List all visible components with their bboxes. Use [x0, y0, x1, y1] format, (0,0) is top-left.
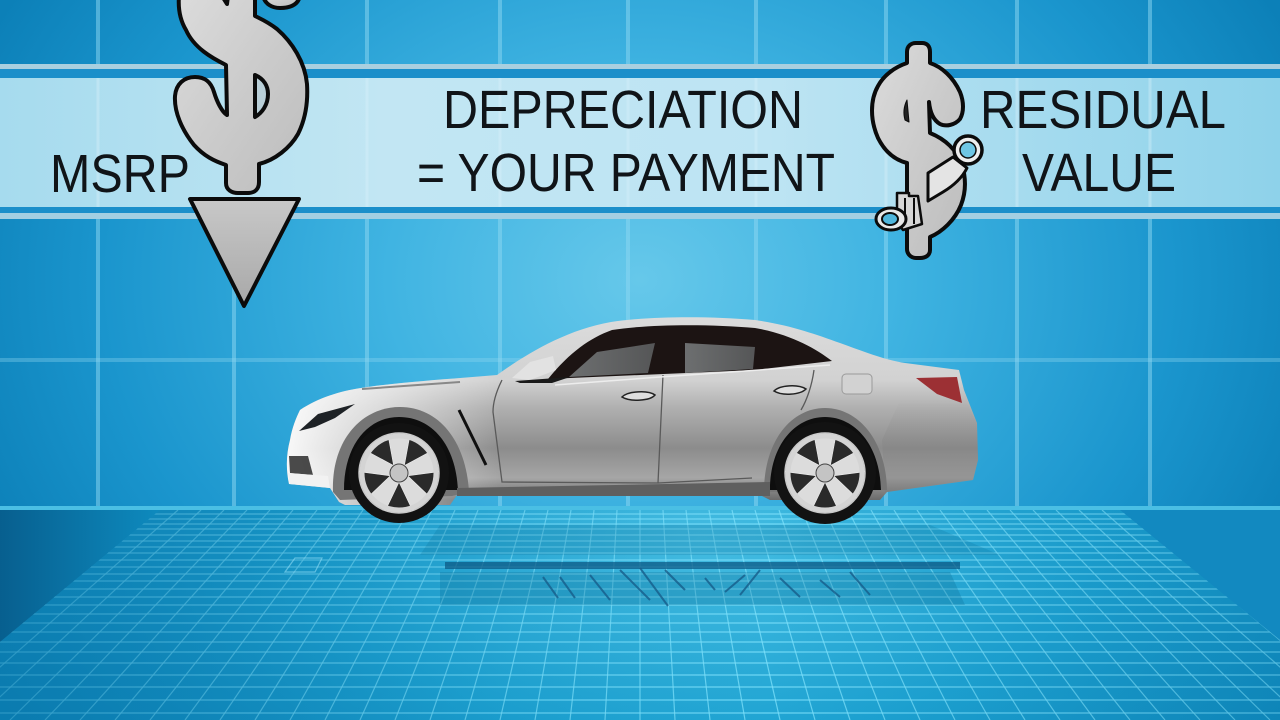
dollar counter [255, 75, 268, 117]
safety pin lower ring [876, 208, 906, 230]
door shoulder highlight [555, 365, 830, 385]
floor horizon glow [0, 506, 1280, 510]
fender vent [459, 410, 486, 465]
label: residual value: VALUE [1022, 143, 1176, 203]
background panel grid [0, 0, 1280, 510]
heading: depreciation equals your payment: = YOUR PAYMENT [417, 143, 835, 203]
icon: large dollar sign with down arrow [175, 0, 307, 306]
rear shading [882, 400, 978, 492]
rear wheel arch [764, 408, 887, 492]
banner band [0, 64, 1280, 219]
door seams [493, 370, 814, 483]
side mirror [512, 356, 556, 380]
rear wheel [774, 422, 876, 524]
safety pin body [928, 157, 967, 201]
heading: depreciation equals your payment [417, 80, 835, 203]
front highlight [286, 378, 484, 505]
small dollar sign [872, 43, 965, 258]
dollar sign [175, 0, 307, 193]
window surround [548, 325, 832, 379]
door handles [622, 392, 655, 400]
hood crease [362, 382, 460, 389]
dollar notch [904, 100, 909, 122]
fuel door [842, 374, 872, 394]
floor surround [0, 506, 1280, 720]
car shadow and reflection on floor [285, 525, 1000, 606]
tail light [916, 377, 962, 403]
label: residual value: RESIDUAL [980, 80, 1226, 140]
front wheel arch [333, 407, 469, 500]
front wheel [349, 423, 449, 523]
car body [287, 317, 978, 505]
perspective grid floor [0, 508, 1280, 720]
icon: dollar sign with safety pin [872, 43, 982, 258]
safety pin upper ring [954, 136, 982, 164]
headlight [299, 404, 355, 431]
label: MSRP: MSRP [50, 144, 190, 204]
rocker [457, 482, 770, 496]
front side glass [569, 343, 655, 377]
rear side glass [685, 343, 755, 373]
heading: depreciation equals your payment: DEPRECIATION [443, 80, 803, 140]
car illustration [285, 317, 978, 524]
dollar top terminal [263, 0, 300, 8]
label: residual value [980, 80, 1226, 203]
safety pin clasp [897, 193, 922, 230]
wheel wells [344, 417, 881, 490]
banner faint panel lines [98, 78, 1150, 207]
front bumper dark trim [289, 456, 313, 475]
down arrow [190, 199, 299, 306]
